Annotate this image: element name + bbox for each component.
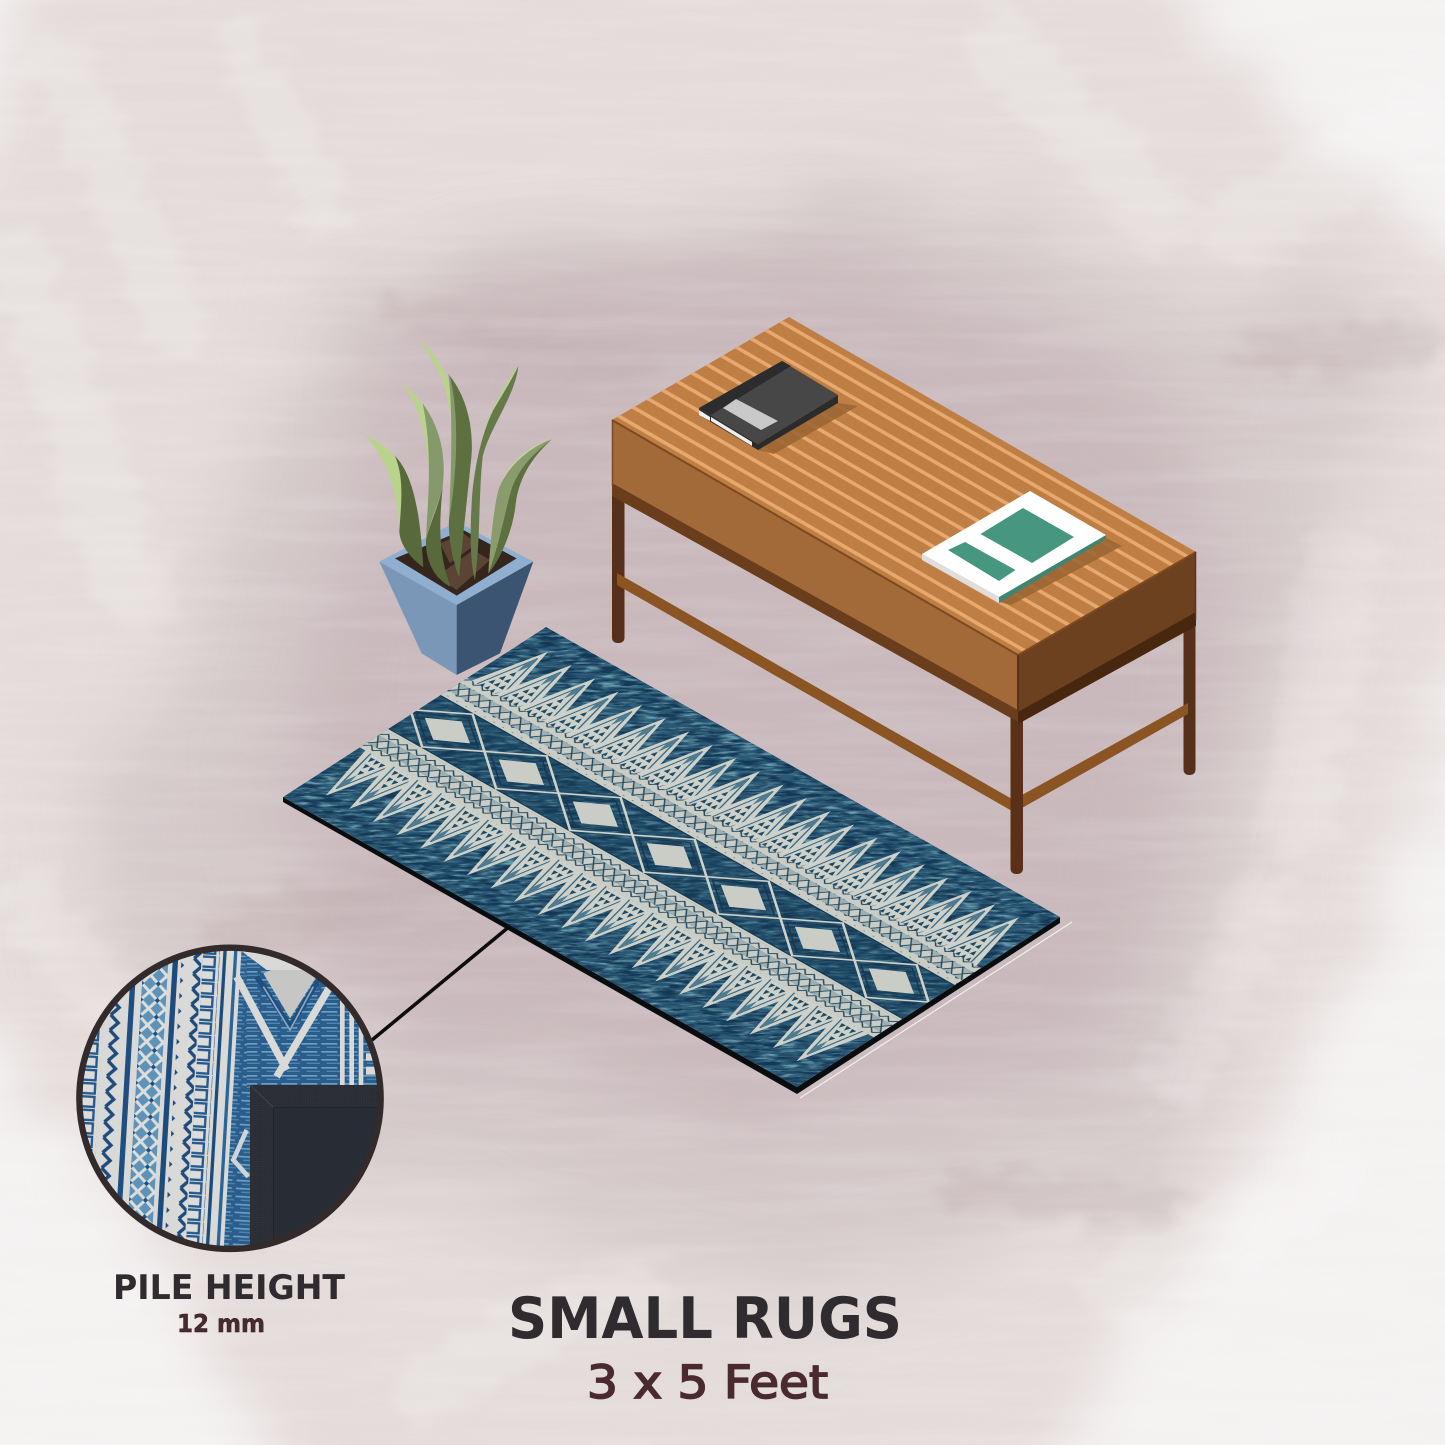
top spikes [470,642,1036,967]
pile detail circle [49,907,410,1293]
product title: SMALL RUGS [508,1286,902,1352]
plant in blue pot [364,340,552,675]
rug edge shadow [283,797,1060,1094]
magazine [922,491,1122,605]
rug close-up stripes [49,907,410,1293]
bottom spikes [308,746,875,1071]
pile height heading: PILE HEIGHT [113,1268,346,1308]
table legs [612,485,1196,874]
central diamond band [388,695,955,1019]
rug backing corner [250,1085,407,1274]
pot [379,522,533,675]
rug [283,627,1072,1098]
wooden table [612,317,1196,874]
pile height label [113,1268,346,1338]
rug pattern [300,637,1041,1073]
table side panel [1018,552,1196,722]
product size: 3 x 5 Feet [587,1356,828,1409]
plant leaves [364,340,552,587]
table front panel [612,420,1018,712]
notebook [699,361,858,454]
upper lattice bands [460,678,981,973]
thin floor highlight [800,922,1072,1098]
table top [612,317,1196,712]
lower lattice bands [379,730,900,1025]
leader line to detail circle [372,926,510,1040]
rug body [283,627,1060,1087]
pile height value: 12 mm [177,1309,265,1338]
